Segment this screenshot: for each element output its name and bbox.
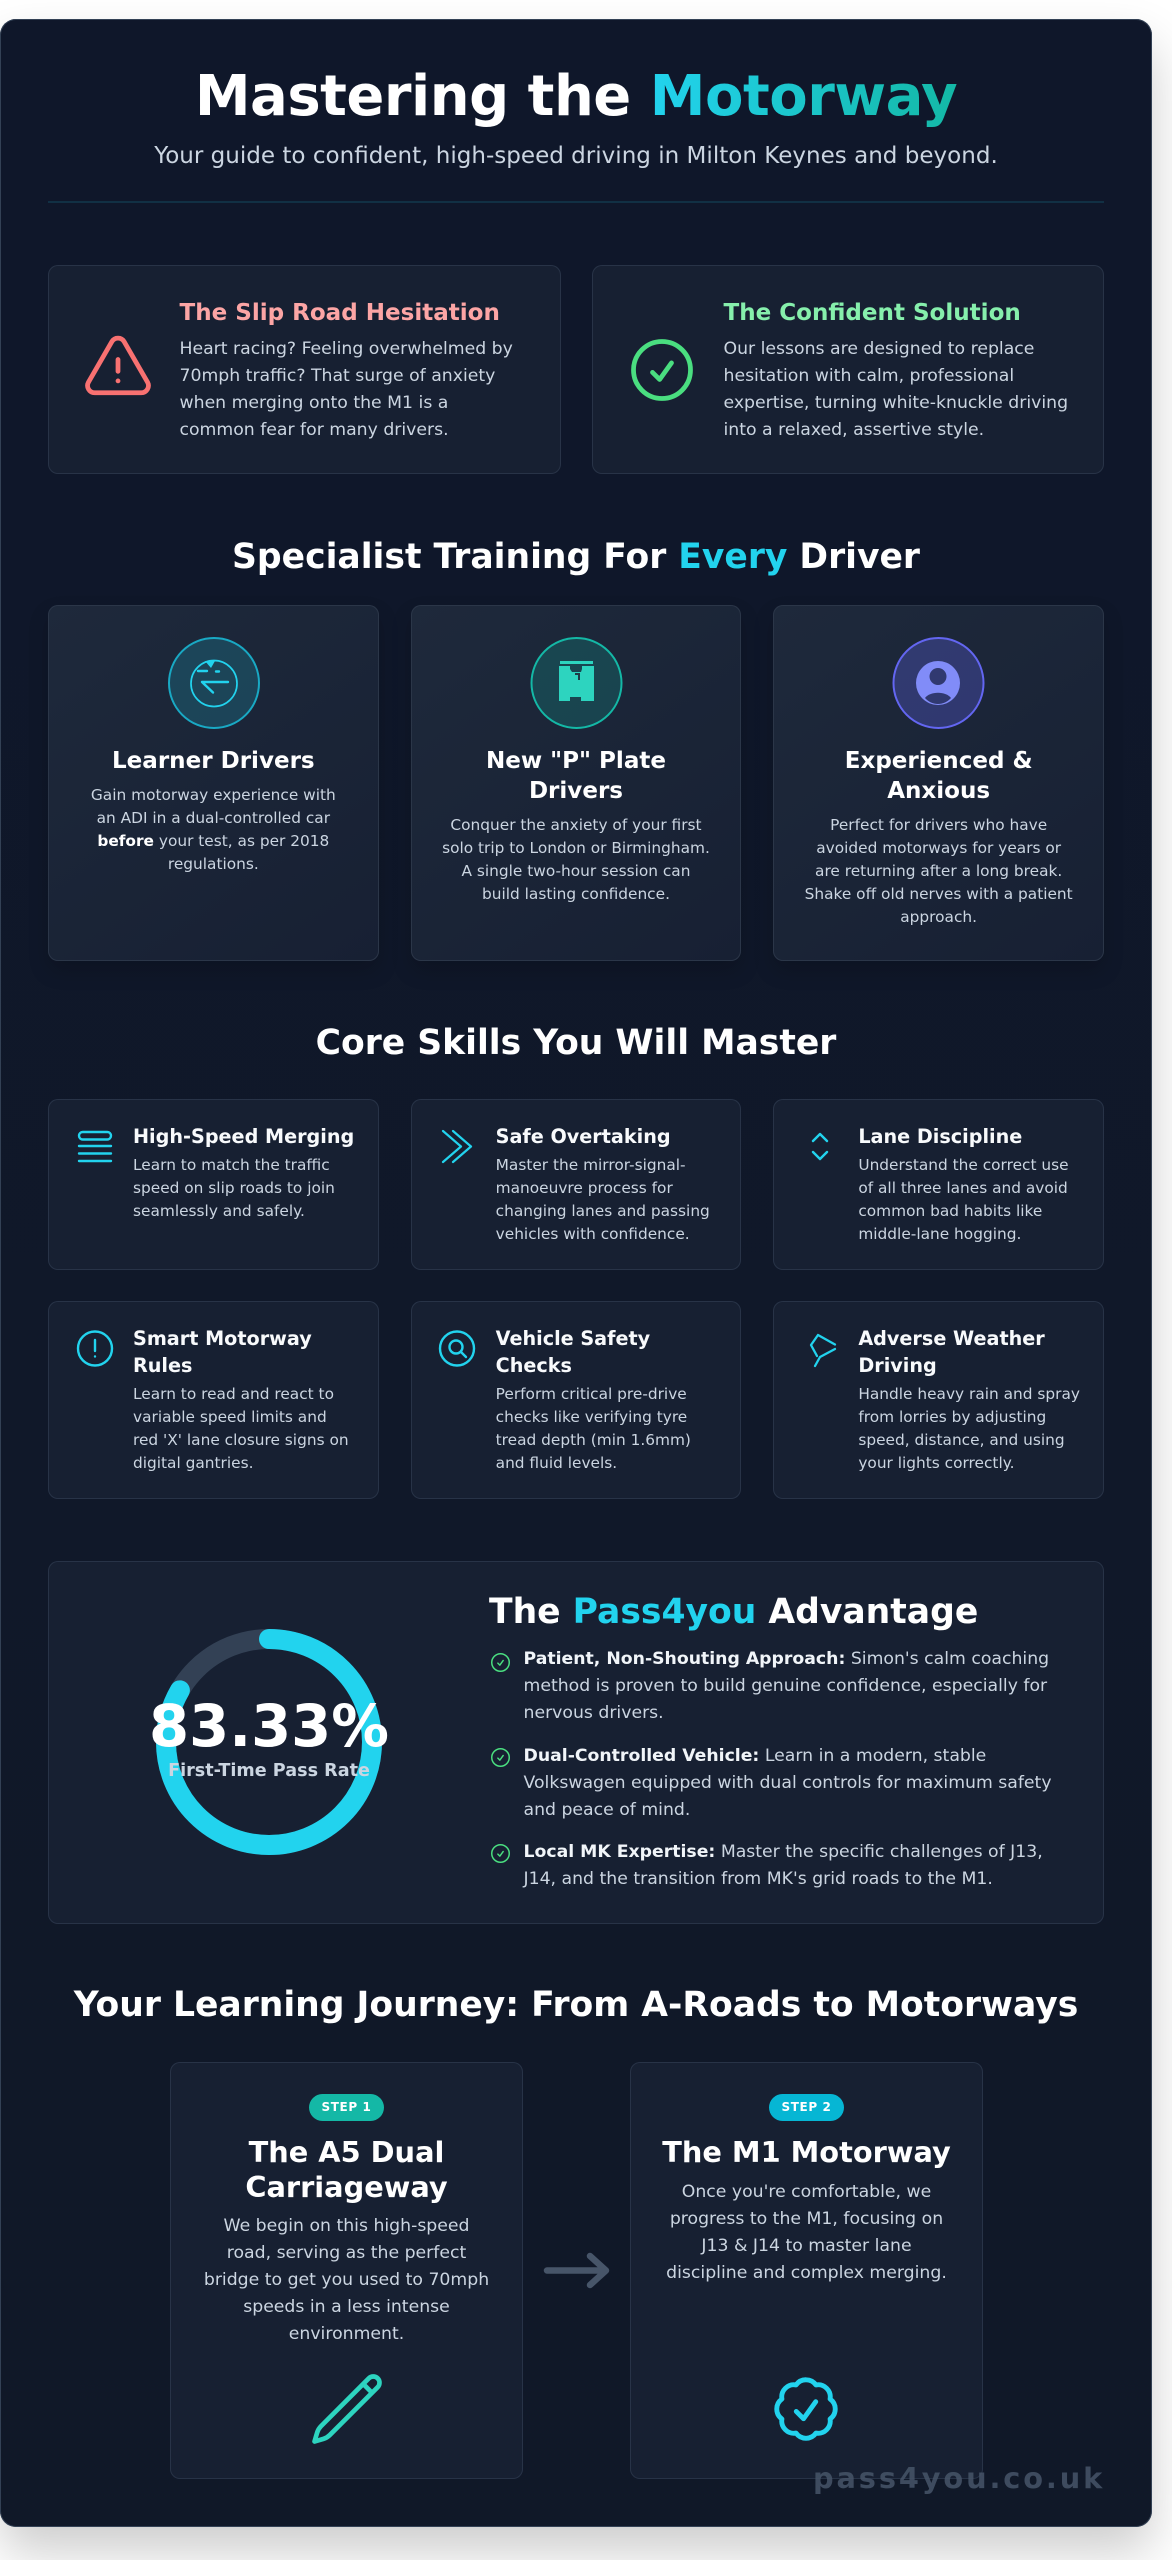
heading: The Pass4you Advantage (489, 1592, 978, 1632)
text block: Conquer the anxiety of your first (450, 816, 702, 834)
panel: the slip road hesitation (48, 265, 560, 474)
text block: Master the mirror-signal- (496, 1156, 686, 1174)
text block: 70mph traffic? That surge of anxiety (180, 366, 495, 386)
panel: experienced and anxious (773, 605, 1104, 961)
heading: specialist training: Specialist Training For Every Driver (232, 536, 920, 576)
text block: discipline and complex merging. (666, 2263, 947, 2283)
badge (769, 2094, 844, 2121)
badge (309, 2094, 384, 2121)
heading: High-Speed Merging (133, 1125, 354, 1148)
text block: patient approach: method is proven to build genuine confidence, especially for (524, 1676, 1047, 1696)
text block (496, 1156, 710, 1243)
heading: Vehicle Safety (496, 1327, 650, 1350)
text block: Perform critical pre-drive (496, 1385, 687, 1403)
icon: check (491, 1844, 510, 1863)
icon: pencil (307, 2369, 387, 2449)
watermark: pass4you.co.uk (813, 2461, 1105, 2495)
text block: dual-controlled vehicle: Dual-Controlled Vehicle: Learn in a modern, stable (524, 1746, 986, 1766)
panel: safe overtaking (411, 1099, 741, 1270)
heading: Drivers (529, 778, 623, 804)
text block: solo trip to London or Birmingham. (442, 839, 710, 857)
heading: Smart Motorway (133, 1327, 312, 1350)
text block (91, 786, 336, 873)
text block: seamlessly and safely. (133, 1202, 305, 1220)
text block: Learn to read and react to (133, 1385, 334, 1403)
panel: high-speed merging (48, 1099, 379, 1270)
heading (496, 1327, 650, 1377)
heading: Checks (496, 1354, 572, 1377)
icon: double chevron (442, 1130, 472, 1164)
text block: checks like verifying tyre (496, 1408, 687, 1426)
heading: Anxious (887, 778, 990, 804)
panel: adverse weather driving (773, 1301, 1104, 1499)
text block: avoided motorways for years or (816, 839, 1061, 857)
heading: core skills: Core Skills You Will Master (316, 1023, 836, 1063)
text block: are returning after a long break. (815, 862, 1062, 880)
heading (858, 1327, 1045, 1377)
text block: red 'X' lane closure signs on (133, 1431, 349, 1449)
text block: Once you're comfortable, we (682, 2182, 931, 2202)
text block: of all three lanes and avoid (858, 1179, 1068, 1197)
text block: variable speed limits and (133, 1408, 327, 1426)
icon: merging lanes (78, 1130, 112, 1162)
text block: vehicles with confidence. (496, 1225, 690, 1243)
subtitle: Your guide to confident, high-speed driving in Milton Keynes and beyond. (154, 143, 998, 169)
text block: hesitation with calm, professional (724, 366, 1014, 386)
text block (496, 1385, 691, 1472)
icon: speedometer (168, 637, 260, 729)
badge: STEP 2 (782, 2100, 831, 2114)
icon: up and down chevrons (812, 1132, 828, 1160)
text block: Heart racing? Feeling overwhelmed by (180, 339, 513, 359)
text block: local expertise (522, 1842, 1043, 1889)
icon: check (491, 1748, 510, 1767)
text block: manoeuvre process for (496, 1179, 673, 1197)
text block: digital gantries. (133, 1454, 253, 1472)
icon: p plate (530, 637, 622, 729)
text block: patient approach (524, 1649, 1049, 1723)
text block (858, 1156, 1069, 1243)
panel: lane discipline (773, 1099, 1104, 1270)
text block: and fluid levels. (496, 1454, 617, 1472)
text block: Handle heavy rain and spray (858, 1385, 1080, 1403)
text block: dual-controlled vehicle: and peace of mind. (524, 1800, 690, 1820)
icon: exclamation circle (76, 1330, 114, 1367)
text block: into a relaxed, assertive style. (724, 420, 984, 440)
text block (630, 2179, 983, 2287)
panel: smart motorway rules (48, 1301, 379, 1499)
panel: new p plate drivers (411, 605, 741, 961)
statistic: 83.33% (149, 1693, 389, 1760)
icon: check (491, 1653, 510, 1672)
text block (133, 1385, 349, 1472)
panel: pass4you advantage (48, 1561, 1104, 1924)
text block: local expertise: Local MK Expertise: Master the specific challenges of J13, (524, 1842, 1043, 1862)
text block: bridge to get you used to 70mph (204, 2270, 489, 2290)
text block: dual-controlled vehicle (524, 1746, 1052, 1820)
text block: J13 & J14 to master lane (701, 2236, 912, 2256)
panel: step 1 (170, 2062, 523, 2479)
icon: user circle (892, 637, 984, 729)
text block (442, 816, 710, 903)
heading: Adverse Weather (858, 1327, 1045, 1350)
heading: Safe Overtaking (496, 1125, 671, 1148)
text block: speed on slip roads to join (133, 1179, 335, 1197)
text block (204, 2216, 489, 2344)
icon: check circle (631, 339, 693, 401)
text block (133, 1156, 335, 1220)
heading (845, 748, 1033, 804)
heading: Lane Discipline (858, 1125, 1022, 1148)
heading: New "P" Plate (486, 748, 666, 774)
text block: We begin on this high-speed (224, 2216, 469, 2236)
badge: STEP 1 (322, 2100, 371, 2114)
text block: Shake off old nerves with a patient (805, 885, 1073, 903)
text block (724, 339, 1068, 440)
text block: changing lanes and passing (496, 1202, 710, 1220)
icon: magnifier in circle (438, 1330, 476, 1367)
chart: pass rate ring (156, 1629, 382, 1855)
icon: check badge (767, 2370, 845, 2448)
text block: when merging onto the M1 is a (180, 393, 448, 413)
text block: local expertise: J14, and the transition from MK's grid roads to the M1. (524, 1869, 993, 1889)
text block: road, serving as the perfect (227, 2243, 466, 2263)
text block: Learn to match the traffic (133, 1156, 330, 1174)
text block: common fear for many drivers. (180, 420, 449, 440)
heading: Carriageway (245, 2170, 448, 2204)
text block: tread depth (min 1.6mm) (496, 1431, 691, 1449)
statistic label: First-Time Pass Rate (168, 1761, 370, 1781)
heading: The Slip Road Hesitation (180, 300, 500, 326)
text block: progress to the M1, focusing on (670, 2209, 943, 2229)
icon: warning triangle (85, 336, 151, 396)
text block: A single two-hour session can (462, 862, 690, 880)
text block: expertise, turning white-knuckle driving (724, 393, 1068, 413)
text block: your lights correctly. (858, 1454, 1015, 1472)
panel: learner drivers (48, 605, 379, 961)
text block (180, 339, 513, 440)
text block: middle-lane hogging. (858, 1225, 1021, 1243)
text block (805, 816, 1073, 926)
text block: speed, distance, and using (858, 1431, 1065, 1449)
text block: environment. (289, 2324, 404, 2344)
text block: build lasting confidence. (482, 885, 670, 903)
heading (133, 1327, 312, 1377)
arrow (544, 2252, 610, 2289)
heading: Driving (858, 1354, 937, 1377)
text block: patient approach: nervous drivers. (524, 1703, 664, 1723)
text block: Our lessons are designed to replace (724, 339, 1034, 359)
heading: The A5 Dual (249, 2135, 444, 2169)
text block: approach. (900, 908, 977, 926)
text block: an ADI in a dual-controlled car (97, 809, 330, 827)
text block: speeds in a less intense (243, 2297, 450, 2317)
text block: Gain motorway experience with (91, 786, 336, 804)
panel: the confident solution (592, 265, 1104, 474)
heading: learning journey: Your Learning Journey: From A-Roads to Motorways (74, 1985, 1078, 2025)
text block (858, 1385, 1080, 1472)
heading: The Confident Solution (724, 300, 1021, 326)
text block: regulations. (168, 855, 259, 873)
icon: wiper (810, 1334, 836, 1368)
text block: common bad habits like (858, 1202, 1042, 1220)
heading: Experienced & (845, 748, 1033, 774)
text block: dual-controlled vehicle: Volkswagen equipped with dual controls for maximum safety (524, 1773, 1052, 1793)
heading (245, 2135, 448, 2204)
panel: step 2 (630, 2062, 983, 2479)
heading: Learner Drivers (112, 748, 315, 774)
text block: Understand the correct use (858, 1156, 1069, 1174)
text block: before your test, as per 2018 (97, 832, 329, 850)
panel: vehicle safety checks (411, 1301, 741, 1499)
heading (486, 748, 666, 804)
title: Mastering the Motorway (195, 64, 957, 129)
text block: patient approach: Patient, Non-Shouting Approach: Simon's calm coaching (524, 1649, 1049, 1669)
heading: Rules (133, 1354, 192, 1377)
text block: from lorries by adjusting (858, 1408, 1046, 1426)
text block: Perfect for drivers who have (830, 816, 1047, 834)
heading: The M1 Motorway (662, 2135, 951, 2169)
